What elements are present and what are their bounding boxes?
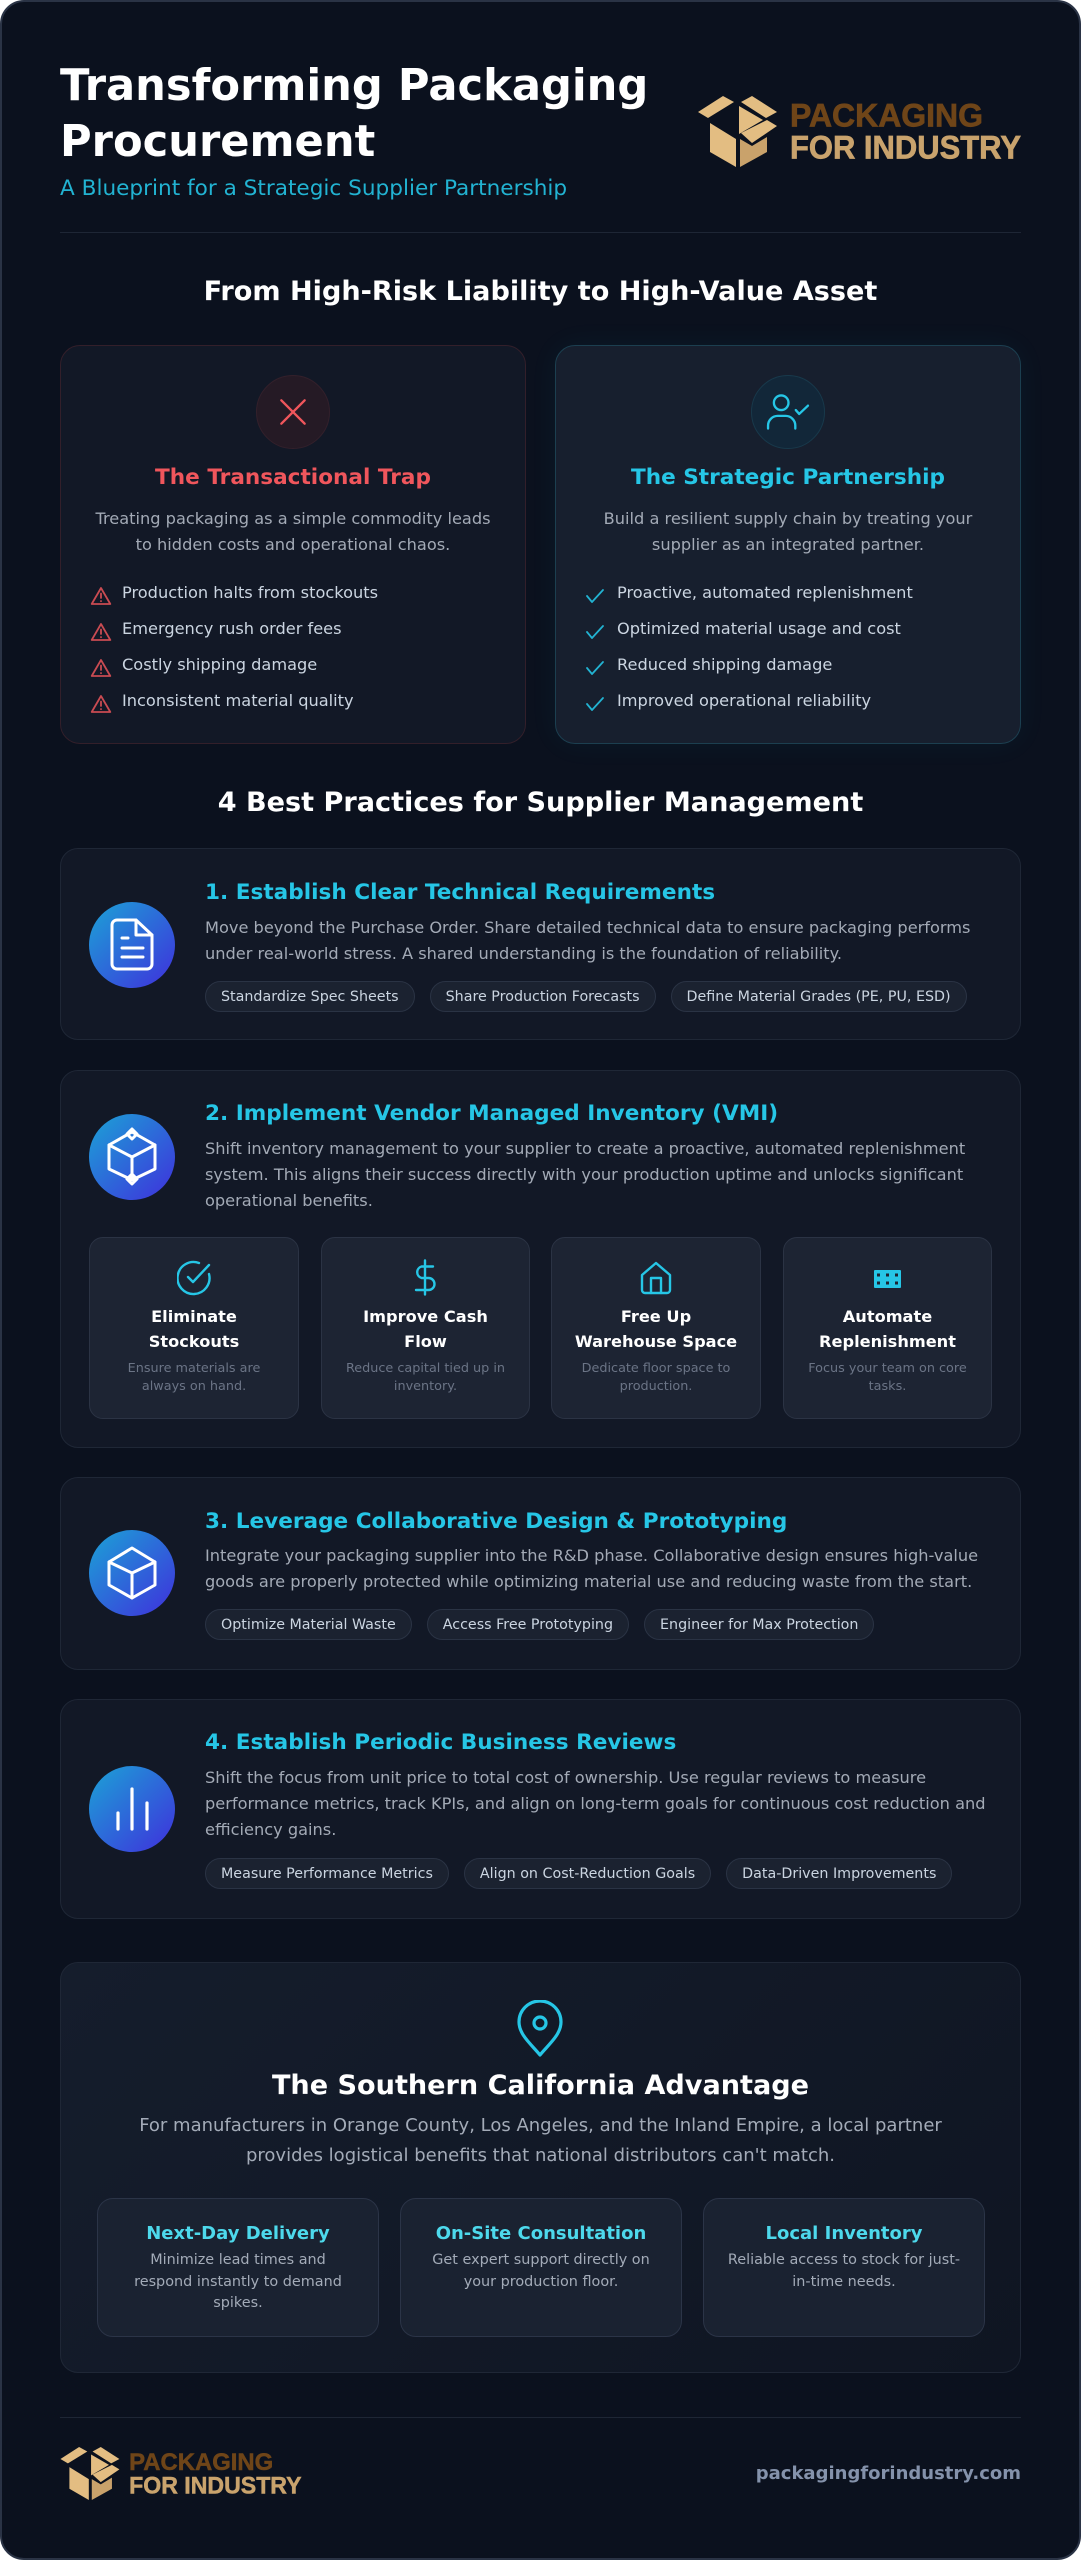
practice 3 text: goods are properly protected while optimizing material use and reducing waste from the start. xyxy=(205,1572,972,1591)
icon: check xyxy=(586,625,604,639)
advantage: next-day delivery xyxy=(97,2198,379,2337)
benefit: eliminate stockouts xyxy=(89,1237,299,1419)
icon: document xyxy=(89,902,175,988)
practice 4 tags: Align on Cost-Reduction Goals xyxy=(480,1866,695,1882)
practice 3 tags: Optimize Material Waste xyxy=(221,1617,396,1633)
practice 2 text: operational benefits. xyxy=(205,1191,373,1210)
practice 2 text xyxy=(205,1139,965,1210)
benefit: automate replenishment xyxy=(783,1237,992,1419)
benefit title xyxy=(363,1307,488,1351)
icon: inventory box xyxy=(89,1114,175,1200)
partnership description: supplier as an integrated partner. xyxy=(652,535,924,554)
title xyxy=(60,61,648,167)
advantage detail: spikes. xyxy=(213,2295,263,2311)
trap description: to hidden costs and operational chaos. xyxy=(136,535,450,554)
practice 2 text: Shift inventory management to your supplier to create a proactive, automated replenishment xyxy=(205,1139,965,1158)
benefit text: Dedicate floor space to xyxy=(582,1361,730,1376)
benefit title: Free Up xyxy=(621,1307,691,1326)
practice 1 text xyxy=(205,918,970,963)
practice 3 tags xyxy=(205,1609,874,1640)
benefit: reliability: Improved operational reliability xyxy=(617,691,871,710)
benefit text: Focus your team on core xyxy=(808,1361,967,1376)
partnership heading: The Strategic Partnership xyxy=(631,465,945,490)
advantage detail: in-time needs. xyxy=(792,2274,896,2290)
icon: warning xyxy=(90,587,112,605)
benefit title: Replenishment xyxy=(819,1332,956,1351)
icon: map pin xyxy=(517,2000,563,2057)
risk: rush fees: Emergency rush order fees xyxy=(122,619,342,638)
practice 3 heading: 3. Leverage Collaborative Design & Prototyping xyxy=(205,1509,787,1534)
practice 4 text: Shift the focus from unit price to total cost of ownership. Use regular reviews to measure xyxy=(205,1768,926,1787)
benefit text: production. xyxy=(620,1379,692,1394)
title: Transforming Packaging xyxy=(60,61,648,111)
icon: check xyxy=(586,589,604,603)
practice 4 heading: 4. Establish Periodic Business Reviews xyxy=(205,1730,676,1755)
benefit: shipping damage: Reduced shipping damage xyxy=(617,655,832,674)
trap description: Treating packaging as a simple commodity leads xyxy=(95,509,491,528)
practice 1 tags: Standardize Spec Sheets xyxy=(221,989,399,1005)
practice 4 tags xyxy=(205,1858,952,1889)
practice 3 text xyxy=(205,1546,978,1591)
heading: from liability to asset: From High-Risk Liability to High-Value Asset xyxy=(204,276,877,307)
practice 1 heading: 1. Establish Clear Technical Requirements xyxy=(205,880,715,905)
advantage text: provides logistical benefits that national distributors can't match. xyxy=(246,2145,835,2166)
benefit: free warehouse space xyxy=(551,1237,761,1419)
benefit text xyxy=(582,1361,730,1394)
practice 2 text: system. This aligns their success directly with your production uptime and unlocks significant xyxy=(205,1165,963,1184)
icon: grid block xyxy=(874,1270,901,1288)
partnership description: Build a resilient supply chain by treating your xyxy=(604,509,972,528)
icon: red x xyxy=(256,375,330,449)
icon: user check xyxy=(751,375,825,449)
practice 1 tags xyxy=(205,981,967,1012)
benefit title: Improve Cash xyxy=(363,1307,488,1326)
practice 4 text xyxy=(205,1768,986,1839)
advantage: local inventory xyxy=(703,2198,985,2337)
advantage text: For manufacturers in Orange County, Los Angeles, and the Inland Empire, a local partner xyxy=(139,2115,942,2136)
icon: warning xyxy=(90,695,112,713)
benefit title: Warehouse Space xyxy=(575,1332,737,1351)
benefit title: Eliminate xyxy=(151,1307,237,1326)
practice 1 text: under real-world stress. A shared understanding is the foundation of reliability. xyxy=(205,944,842,963)
icon: dollar xyxy=(414,1259,436,1296)
benefit: replenishment: Proactive, automated replenishment xyxy=(617,583,913,602)
footer logo: PACKAGING xyxy=(129,2449,273,2476)
benefit text xyxy=(808,1361,967,1394)
risk: shipping damage: Costly shipping damage xyxy=(122,655,317,674)
logo: Packaging For Industry xyxy=(698,96,1021,167)
risk: stockouts: Production halts from stockouts xyxy=(122,583,378,602)
title: Procurement xyxy=(60,117,375,167)
icon: house xyxy=(640,1262,672,1294)
advantage title: Local Inventory xyxy=(766,2223,922,2244)
panel: practice 3 xyxy=(60,1477,1021,1670)
advantage detail: Minimize lead times and xyxy=(150,2252,326,2268)
icon: check xyxy=(586,697,604,711)
practice 4 tags: Measure Performance Metrics xyxy=(221,1866,433,1882)
panel: practice 4 xyxy=(60,1699,1021,1919)
practice 3 text: Integrate your packaging supplier into the R&D phase. Collaborative design ensures high-value xyxy=(205,1546,978,1565)
advantage detail xyxy=(432,2252,650,2290)
benefit text: always on hand. xyxy=(142,1379,246,1394)
practice 3 tags: Engineer for Max Protection xyxy=(660,1617,858,1633)
icon: bar chart xyxy=(89,1766,175,1852)
benefit text: Reduce capital tied up in xyxy=(346,1361,505,1376)
icon: warning xyxy=(90,623,112,641)
icon: warning xyxy=(90,659,112,677)
panel: southern california advantage xyxy=(60,1962,1021,2373)
benefit text: inventory. xyxy=(394,1379,457,1394)
panel: practice 1 xyxy=(60,848,1021,1040)
practice 1 text: Move beyond the Purchase Order. Share detailed technical data to ensure packaging performs xyxy=(205,918,970,937)
benefit: improve cash flow xyxy=(321,1237,530,1419)
advantage detail: respond instantly to demand xyxy=(134,2274,342,2290)
panel: the strategic partnership xyxy=(555,345,1021,744)
advantage detail: your production floor. xyxy=(464,2274,618,2290)
footer logo xyxy=(60,2447,302,2500)
benefit title: Automate xyxy=(843,1307,932,1326)
benefit title xyxy=(819,1307,956,1351)
footer website: packagingforindustry.com xyxy=(756,2463,1021,2484)
practice 3 tags: Access Free Prototyping xyxy=(443,1617,613,1633)
logo: Packaging For Industry: PACKAGING xyxy=(790,98,983,134)
benefit text: Ensure materials are xyxy=(128,1361,260,1376)
trap description xyxy=(95,509,491,554)
benefit text xyxy=(346,1361,505,1394)
advantage detail: Reliable access to stock for just- xyxy=(728,2252,960,2268)
icon: check xyxy=(586,661,604,675)
benefit: material usage: Optimized material usage and cost xyxy=(617,619,901,638)
heading: 4 best practices: 4 Best Practices for Supplier Management xyxy=(218,787,863,818)
partnership description xyxy=(604,509,972,554)
icon: box xyxy=(89,1530,175,1616)
advantage: on-site consultation xyxy=(400,2198,682,2337)
practice 4 tags: Data-Driven Improvements xyxy=(742,1866,936,1882)
risk: material quality: Inconsistent material quality xyxy=(122,691,354,710)
benefit title: Flow xyxy=(404,1332,447,1351)
trap heading: The Transactional Trap xyxy=(155,465,431,490)
practice 1 tags: Define Material Grades (PE, PU, ESD) xyxy=(687,989,951,1005)
benefit text: tasks. xyxy=(869,1379,906,1394)
practice 4 text: performance metrics, track KPIs, and align on long-term goals for continuous cost reduction and xyxy=(205,1794,986,1813)
benefit text xyxy=(128,1361,260,1394)
advantage title: On-Site Consultation xyxy=(436,2223,646,2244)
practice 1 tags: Share Production Forecasts xyxy=(446,989,640,1005)
panel: practice 2 xyxy=(60,1070,1021,1448)
advantage text xyxy=(139,2115,942,2166)
panel: the transactional trap xyxy=(60,345,526,744)
advantage title: Next-Day Delivery xyxy=(146,2223,330,2244)
benefit title: Stockouts xyxy=(149,1332,239,1351)
practice 2 heading: 2. Implement Vendor Managed Inventory (VMI) xyxy=(205,1101,778,1126)
advantage detail: Get expert support directly on xyxy=(432,2252,650,2268)
benefit title xyxy=(575,1307,737,1351)
advantage detail xyxy=(728,2252,960,2290)
advantage heading: The Southern California Advantage xyxy=(272,2070,809,2101)
icon: check circle xyxy=(177,1260,211,1296)
practice 4 text: efficiency gains. xyxy=(205,1820,336,1839)
subtitle: A Blueprint for a Strategic Supplier Partnership xyxy=(60,176,567,201)
advantage detail xyxy=(134,2252,342,2311)
benefit title xyxy=(149,1307,239,1351)
